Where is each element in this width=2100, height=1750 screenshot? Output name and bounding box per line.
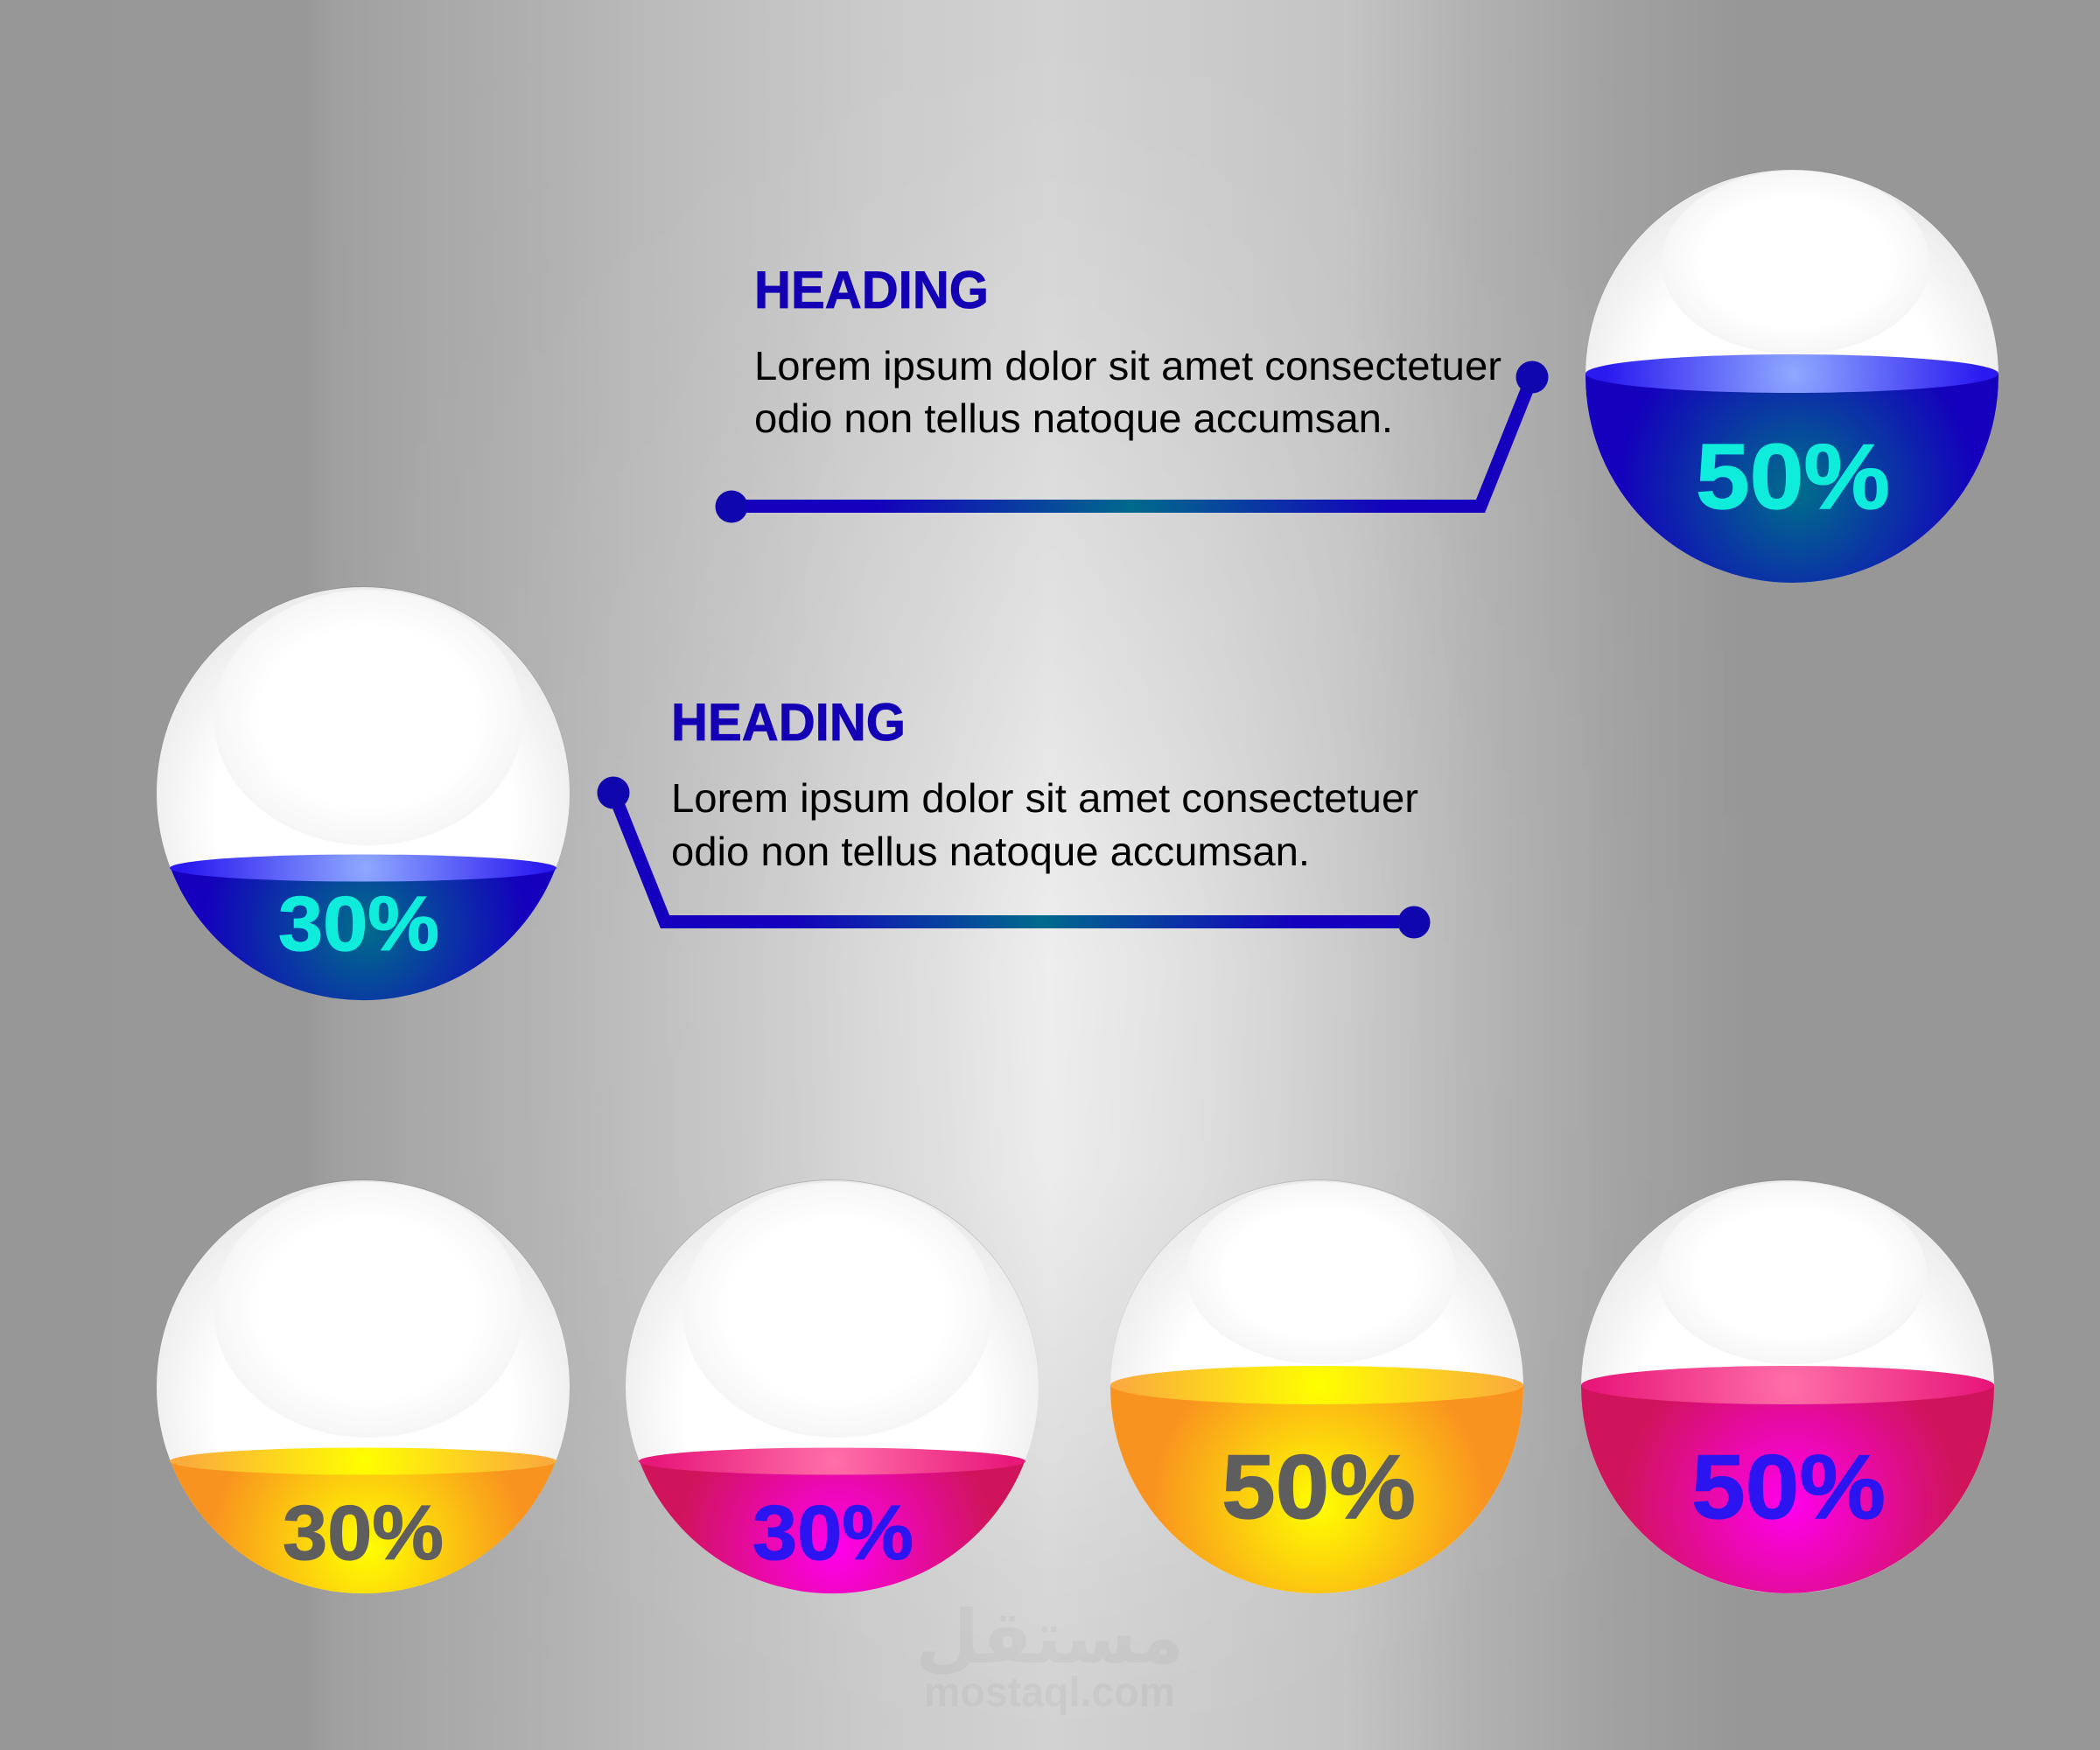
connector line	[716, 360, 1549, 523]
sphere: yellow 30%	[157, 1180, 570, 1593]
body text: odio non tellus natoque accumsan.	[671, 829, 1310, 874]
percent label: 30%	[278, 880, 439, 967]
sphere: blue 30%	[157, 586, 570, 1000]
body text: odio non tellus natoque accumsan.	[754, 396, 1393, 441]
heading: HEADING	[671, 693, 906, 752]
percent label: 50%	[1691, 1437, 1886, 1538]
sphere: pink 30%	[626, 1180, 1039, 1593]
connector line	[597, 777, 1430, 938]
percent label: 50%	[1696, 425, 1890, 528]
background	[341, 0, 1654, 1750]
panel: second callout	[597, 693, 1430, 938]
watermark: مستقل	[915, 1594, 1185, 1680]
panel: top callout	[716, 261, 1549, 523]
percent label: 30%	[283, 1489, 444, 1576]
body text: Lorem ipsum dolor sit amet consectetuer	[671, 775, 1418, 821]
sphere: pink 50%	[1581, 1180, 1994, 1593]
watermark: mostaql.com	[924, 1670, 1175, 1716]
body text	[671, 775, 1418, 874]
body text: Lorem ipsum dolor sit amet consectetuer	[754, 343, 1502, 388]
body text	[754, 343, 1502, 441]
percent label: 50%	[1222, 1437, 1416, 1538]
heading: HEADING	[754, 261, 989, 319]
sphere: blue 50%	[1586, 169, 1998, 583]
percent label: 30%	[752, 1489, 914, 1576]
sphere: yellow 50%	[1110, 1180, 1523, 1593]
